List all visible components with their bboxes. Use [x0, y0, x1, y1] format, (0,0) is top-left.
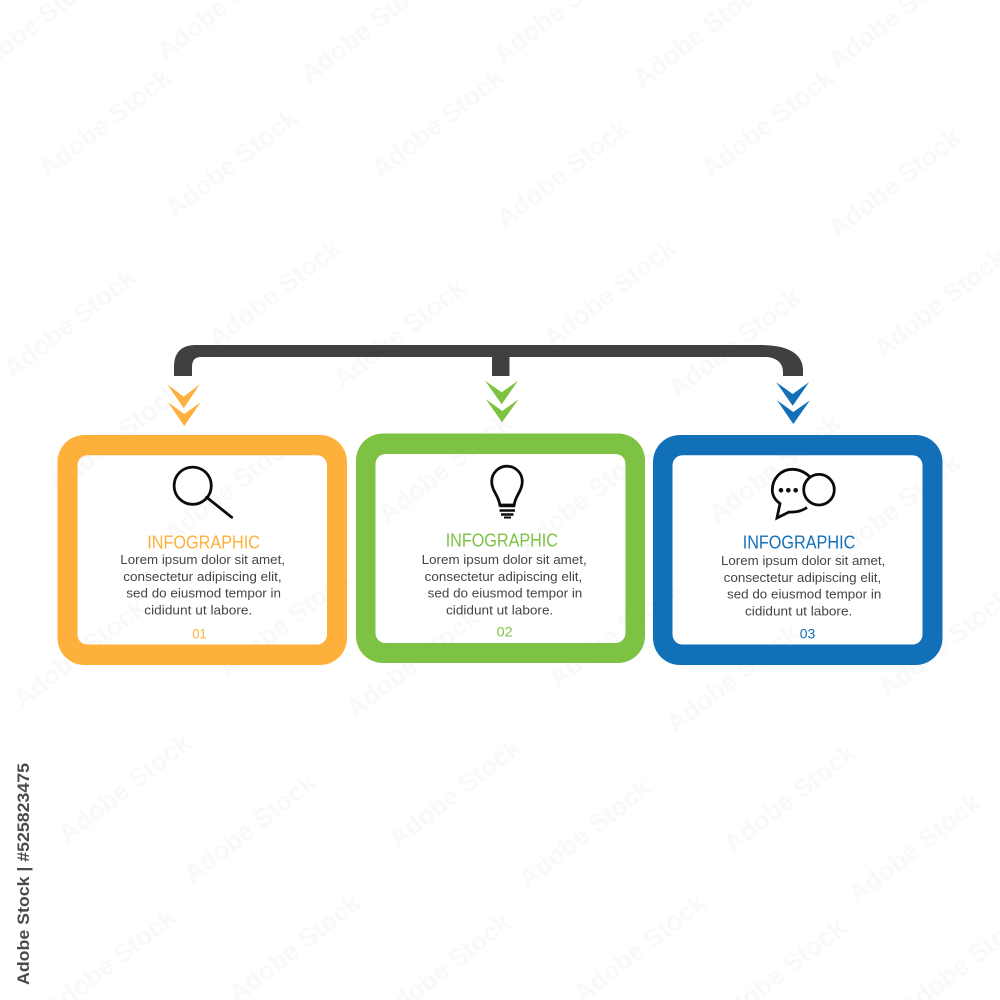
background watermark pattern: Adobe Stock [543, 572, 687, 694]
background watermark pattern: Adobe Stock [703, 407, 847, 529]
green frame [356, 434, 645, 663]
background watermark pattern: Adobe Stock [823, 447, 967, 569]
stock id label: Adobe Stock | #525823475 [14, 763, 33, 985]
background watermark pattern: Adobe Stock [8, 592, 152, 714]
arrows: green [485, 381, 519, 422]
body text [721, 553, 885, 619]
background watermark pattern: Adobe Stock [366, 62, 510, 184]
blue frame [653, 435, 942, 665]
body text: consectetur adipiscing elit, [425, 569, 582, 584]
body text: sed do eiusmod tempor in [126, 586, 281, 601]
body text [120, 552, 285, 618]
body text: consectetur adipiscing elit, [123, 569, 282, 584]
body text [422, 552, 587, 618]
orange frame [58, 435, 347, 665]
body text: Lorem ipsum dolor sit amet, [422, 552, 587, 567]
background watermark pattern: Adobe Stock [373, 407, 517, 529]
arrows: orange [167, 384, 201, 426]
number: 03 [800, 625, 816, 641]
background watermark pattern: Adobe Stock [661, 617, 805, 739]
panel: 02 idea [356, 434, 645, 663]
number: 02 [497, 623, 513, 639]
body text: cididunt ut labore. [745, 604, 852, 619]
background watermark pattern: Adobe Stock [203, 232, 347, 354]
background watermark pattern: Adobe Stock [696, 62, 840, 184]
body text: cididunt ut labore. [446, 603, 553, 618]
icon: light bulb [492, 466, 522, 518]
background watermark pattern: Adobe Stock [663, 282, 807, 404]
body text: Lorem ipsum dolor sit amet, [120, 552, 285, 567]
background watermark pattern: Adobe Stock [843, 787, 987, 909]
background watermark pattern: Adobe Stock [33, 62, 177, 184]
background watermark pattern: Adobe Stock [491, 112, 635, 234]
background watermark pattern: Adobe Stock [178, 767, 322, 889]
background watermark pattern: Adobe Stock [158, 427, 302, 549]
body text: sed do eiusmod tempor in [428, 586, 582, 601]
background watermark pattern: Adobe Stock [823, 122, 967, 244]
panel: 01 search [58, 435, 347, 665]
background watermark pattern: Adobe Stock [0, 262, 142, 384]
background watermark pattern: Adobe Stock [213, 562, 357, 684]
arrows: blue [776, 382, 810, 424]
background watermark pattern: Adobe Stock [341, 602, 485, 724]
connector bracket [174, 345, 803, 376]
body text: consectetur adipiscing elit, [724, 570, 881, 585]
body text: sed do eiusmod tempor in [727, 587, 881, 602]
background watermark pattern: Adobe Stock [43, 377, 187, 499]
body text: cididunt ut labore. [144, 603, 252, 618]
icon: chat bubbles [772, 469, 834, 518]
number: 01 [192, 625, 207, 641]
background watermark pattern: Adobe Stock [383, 732, 527, 854]
heading: INFOGRAPHIC [147, 532, 260, 552]
background watermark pattern: Adobe Stock [718, 737, 862, 859]
icon: magnifier [174, 467, 232, 517]
panel: 03 chat [653, 435, 942, 665]
heading: INFOGRAPHIC [446, 531, 558, 551]
background watermark pattern: Adobe Stock [160, 102, 304, 224]
body text: Lorem ipsum dolor sit amet, [721, 553, 885, 568]
background watermark pattern: Adobe Stock [328, 272, 472, 394]
background watermark pattern: Adobe Stock [538, 232, 682, 354]
background watermark pattern: Adobe Stock [513, 437, 657, 559]
heading: INFOGRAPHIC [743, 532, 855, 552]
background watermark pattern: Adobe Stock [53, 727, 197, 849]
background watermark pattern: Adobe Stock [513, 772, 657, 894]
